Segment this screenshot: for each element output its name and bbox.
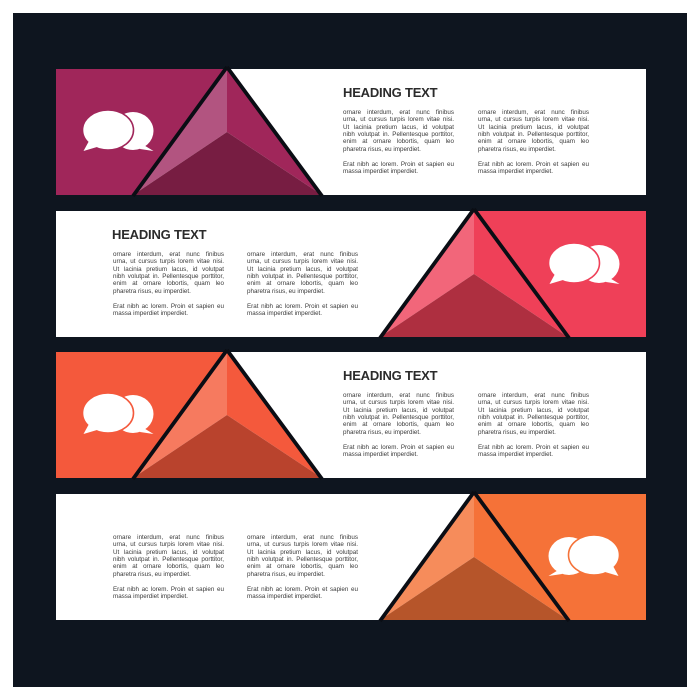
text column 1: massa imperdiet imperdiet. <box>113 310 188 317</box>
text column 1: ornare interdum, erat nunc finibus <box>113 534 224 541</box>
text column 1: enim at ornare lobortis, quam leo <box>113 280 224 287</box>
text column 1: Erat nibh ac lorem. Proin et sapien eu <box>113 586 224 593</box>
text column 2: nibh volutpat in. Pellentesque porttitor, <box>247 556 358 563</box>
text column 1: Ut lacinia pretium lacus, id volutpat <box>343 124 454 131</box>
text column 2: nibh volutpat in. Pellentesque porttitor, <box>478 131 589 138</box>
text column 2: Erat nibh ac lorem. Proin et sapien eu <box>247 586 358 593</box>
text column 2: massa imperdiet imperdiet. <box>247 593 322 600</box>
text column 1 <box>113 251 224 317</box>
panel 4: orange banner <box>56 494 646 620</box>
text column 1: enim at ornare lobortis, quam leo <box>343 421 454 428</box>
text column 2: pharetra risus, eu imperdiet. <box>247 571 325 578</box>
text column 2: massa imperdiet imperdiet. <box>478 451 553 458</box>
text column 2: enim at ornare lobortis, quam leo <box>478 421 589 428</box>
panel 1: magenta banner <box>56 69 646 195</box>
text column 1: massa imperdiet imperdiet. <box>343 451 418 458</box>
panel 3: orange-red banner <box>56 352 646 478</box>
text column 1: massa imperdiet imperdiet. <box>343 168 418 175</box>
text column 2: enim at ornare lobortis, quam leo <box>478 138 589 145</box>
text column 1 <box>343 392 454 458</box>
text column 2: urna, ut cursus turpis lorem vitae nisi. <box>247 541 358 548</box>
text column 1: Erat nibh ac lorem. Proin et sapien eu <box>343 444 454 451</box>
text column 2: ornare interdum, erat nunc finibus <box>247 251 358 258</box>
text column 1 <box>343 109 454 175</box>
heading: HEADING TEXT <box>112 227 206 242</box>
text column 1: ornare interdum, erat nunc finibus <box>343 392 454 399</box>
text column 1: enim at ornare lobortis, quam leo <box>343 138 454 145</box>
heading: HEADING TEXT <box>343 368 437 383</box>
text column 2: pharetra risus, eu imperdiet. <box>478 146 556 153</box>
text column 2: urna, ut cursus turpis lorem vitae nisi. <box>478 116 589 123</box>
text column 2: ornare interdum, erat nunc finibus <box>478 392 589 399</box>
text column 2: urna, ut cursus turpis lorem vitae nisi. <box>247 258 358 265</box>
panel 2: red banner <box>56 211 646 337</box>
text column 2: Ut lacinia pretium lacus, id volutpat <box>478 124 589 131</box>
text column 1: Erat nibh ac lorem. Proin et sapien eu <box>343 161 454 168</box>
text column 1: ornare interdum, erat nunc finibus <box>113 251 224 258</box>
text column 2: pharetra risus, eu imperdiet. <box>247 288 325 295</box>
text column 1: pharetra risus, eu imperdiet. <box>343 146 421 153</box>
graphic: magenta block, pyramid and speech bubbles <box>56 66 324 197</box>
graphic: orange block, pyramid and speech bubbles <box>378 491 646 622</box>
text column 2: Ut lacinia pretium lacus, id volutpat <box>478 407 589 414</box>
graphic: orange-red block, pyramid and speech bubbles <box>56 349 324 480</box>
text column 1: nibh volutpat in. Pellentesque porttitor, <box>343 131 454 138</box>
text column 1: Ut lacinia pretium lacus, id volutpat <box>113 266 224 273</box>
text column 2: urna, ut cursus turpis lorem vitae nisi. <box>478 399 589 406</box>
text column 2 <box>478 392 589 458</box>
text column 1: urna, ut cursus turpis lorem vitae nisi. <box>343 116 454 123</box>
heading: HEADING TEXT <box>343 85 437 100</box>
text column 1 <box>113 534 224 600</box>
text column 1: nibh volutpat in. Pellentesque porttitor, <box>113 273 224 280</box>
text column 2: massa imperdiet imperdiet. <box>247 310 322 317</box>
text column 2 <box>247 534 358 600</box>
text column 2: pharetra risus, eu imperdiet. <box>478 429 556 436</box>
text column 1: Erat nibh ac lorem. Proin et sapien eu <box>113 303 224 310</box>
text column 2: Ut lacinia pretium lacus, id volutpat <box>247 549 358 556</box>
text column 2 <box>478 109 589 175</box>
graphic: red block, pyramid and speech bubbles <box>378 208 646 339</box>
text column 2: nibh volutpat in. Pellentesque porttitor, <box>247 273 358 280</box>
text column 2: enim at ornare lobortis, quam leo <box>247 280 358 287</box>
text column 2: Ut lacinia pretium lacus, id volutpat <box>247 266 358 273</box>
text column 1: pharetra risus, eu imperdiet. <box>343 429 421 436</box>
text column 1: pharetra risus, eu imperdiet. <box>113 571 191 578</box>
text column 2: Erat nibh ac lorem. Proin et sapien eu <box>478 161 589 168</box>
text column 2: Erat nibh ac lorem. Proin et sapien eu <box>478 444 589 451</box>
text column 2 <box>247 251 358 317</box>
text column 1: urna, ut cursus turpis lorem vitae nisi. <box>343 399 454 406</box>
text column 1: pharetra risus, eu imperdiet. <box>113 288 191 295</box>
text column 2: massa imperdiet imperdiet. <box>478 168 553 175</box>
text column 1: nibh volutpat in. Pellentesque porttitor, <box>113 556 224 563</box>
text column 1: urna, ut cursus turpis lorem vitae nisi. <box>113 258 224 265</box>
text column 1: nibh volutpat in. Pellentesque porttitor, <box>343 414 454 421</box>
text column 2: nibh volutpat in. Pellentesque porttitor, <box>478 414 589 421</box>
text column 1: Ut lacinia pretium lacus, id volutpat <box>343 407 454 414</box>
text column 1: urna, ut cursus turpis lorem vitae nisi. <box>113 541 224 548</box>
text column 1: massa imperdiet imperdiet. <box>113 593 188 600</box>
text column 1: enim at ornare lobortis, quam leo <box>113 563 224 570</box>
text column 2: enim at ornare lobortis, quam leo <box>247 563 358 570</box>
text column 2: ornare interdum, erat nunc finibus <box>478 109 589 116</box>
text column 1: ornare interdum, erat nunc finibus <box>343 109 454 116</box>
text column 1: Ut lacinia pretium lacus, id volutpat <box>113 549 224 556</box>
text column 2: Erat nibh ac lorem. Proin et sapien eu <box>247 303 358 310</box>
text column 2: ornare interdum, erat nunc finibus <box>247 534 358 541</box>
